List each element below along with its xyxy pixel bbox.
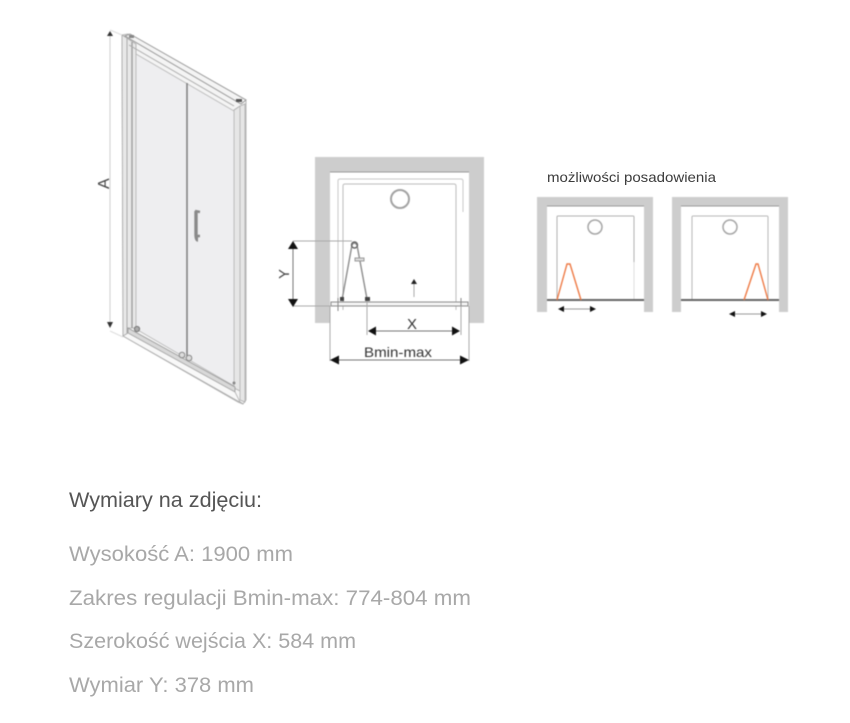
opening arrow	[411, 279, 417, 297]
dimensions heading: Wymiary na zdjęciu:	[69, 489, 262, 512]
folded door	[340, 242, 370, 301]
wall	[315, 157, 484, 323]
dimension X	[367, 301, 461, 336]
height A: Wysokość A: 1900 mm	[69, 543, 293, 566]
installation option: right	[672, 197, 788, 317]
door perspective drawing	[96, 30, 246, 404]
entry width X: Szerokość wejścia X: 584 mm	[69, 630, 356, 653]
dimension Bmin-max	[330, 306, 469, 364]
dimension Y: Y	[276, 269, 293, 279]
bottom track	[123, 326, 243, 404]
range Bmin-max: Zakres regulacji Bmin-max: 774-804 mm	[69, 587, 471, 610]
dimension A: A	[96, 178, 113, 189]
door frame	[122, 34, 246, 404]
dimension Y: Wymiar Y: 378 mm	[69, 674, 254, 697]
main floor plan	[276, 157, 484, 364]
dimensions list	[69, 543, 471, 697]
door handle	[195, 211, 200, 240]
dimension Bmin-max: Bmin-max	[364, 344, 432, 360]
shower tray	[338, 179, 463, 310]
dimension A	[96, 30, 123, 337]
installation option: left	[537, 197, 653, 312]
dimension X: X	[407, 316, 417, 333]
dimension Y	[276, 241, 352, 307]
door track	[331, 298, 468, 311]
centre door seam	[186, 83, 188, 357]
drain	[391, 190, 409, 208]
glass panels	[136, 54, 234, 386]
installation options heading: możliwości posadowienia	[547, 169, 716, 185]
